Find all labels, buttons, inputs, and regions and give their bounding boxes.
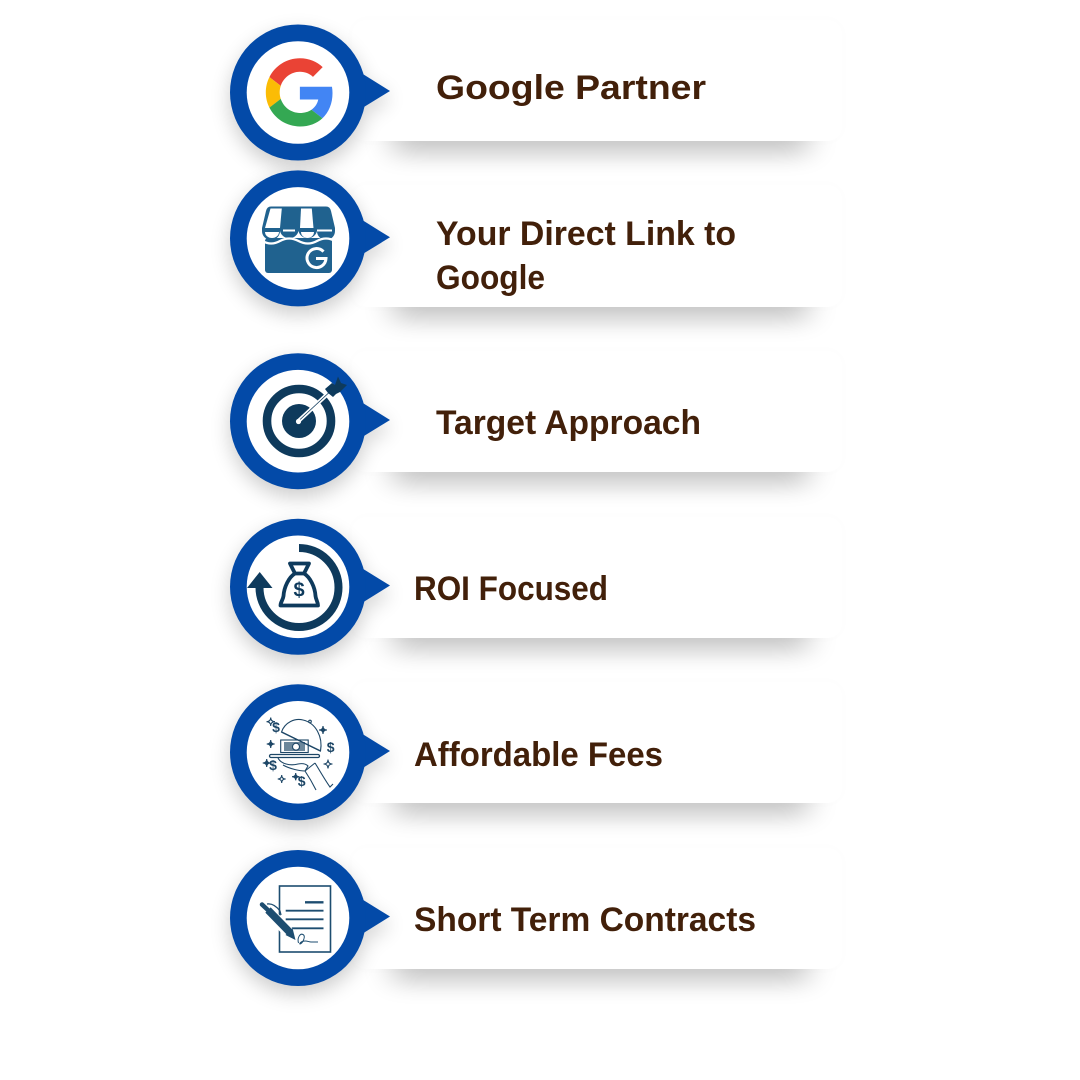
item: Target Approach <box>230 351 842 497</box>
label: Short Term Contracts: Short Term Contracts <box>414 901 756 939</box>
label: Your Direct Link to Google: Your Direct Link to <box>436 215 736 253</box>
item: ROI Focused <box>230 517 842 663</box>
card: Google Partner <box>352 20 842 155</box>
card: Short Term Contracts <box>352 848 842 983</box>
label: Google Partner: Google Partner <box>436 69 706 107</box>
item: Your Direct Link to Google <box>230 170 842 321</box>
item: Affordable Fees <box>230 682 842 828</box>
icon: Google G logo <box>266 58 333 126</box>
item: Short Term Contracts <box>230 848 842 994</box>
item: Google Partner <box>230 20 842 169</box>
icon: target with dart <box>267 376 347 453</box>
icon: contract and pen <box>262 886 330 952</box>
icon: money bag with return arrow <box>247 548 338 627</box>
icon: money served on a tray <box>263 718 335 790</box>
icon: money bag with return arrow: $ <box>293 580 305 602</box>
badge: Google Partner <box>230 24 390 169</box>
label: Target Approach: Target Approach <box>436 404 701 442</box>
label: Your Direct Link to Google <box>436 215 736 297</box>
badge: ROI Focused <box>230 519 390 663</box>
badge: Short Term Contracts <box>230 850 390 994</box>
label: ROI Focused: ROI Focused <box>414 570 608 608</box>
icon: money served on a tray: $ <box>327 739 335 755</box>
badge: Target Approach <box>230 353 390 497</box>
badge: Affordable Fees <box>230 684 390 828</box>
badge: Your Direct Link <box>230 170 390 314</box>
icon: money served on a tray: $ <box>272 719 280 735</box>
label: Affordable Fees: Affordable Fees <box>414 736 663 774</box>
icon: money served on a tray: $ <box>298 773 306 789</box>
card: Your Direct Link <box>352 185 842 321</box>
label: Your Direct Link to Google: Google <box>436 259 545 297</box>
card: Target Approach <box>352 351 842 486</box>
card: Affordable Fees <box>352 682 842 817</box>
card: ROI Focused <box>352 517 842 652</box>
icon: Google storefront <box>262 206 335 273</box>
icon: money served on a tray: $ <box>269 757 277 773</box>
